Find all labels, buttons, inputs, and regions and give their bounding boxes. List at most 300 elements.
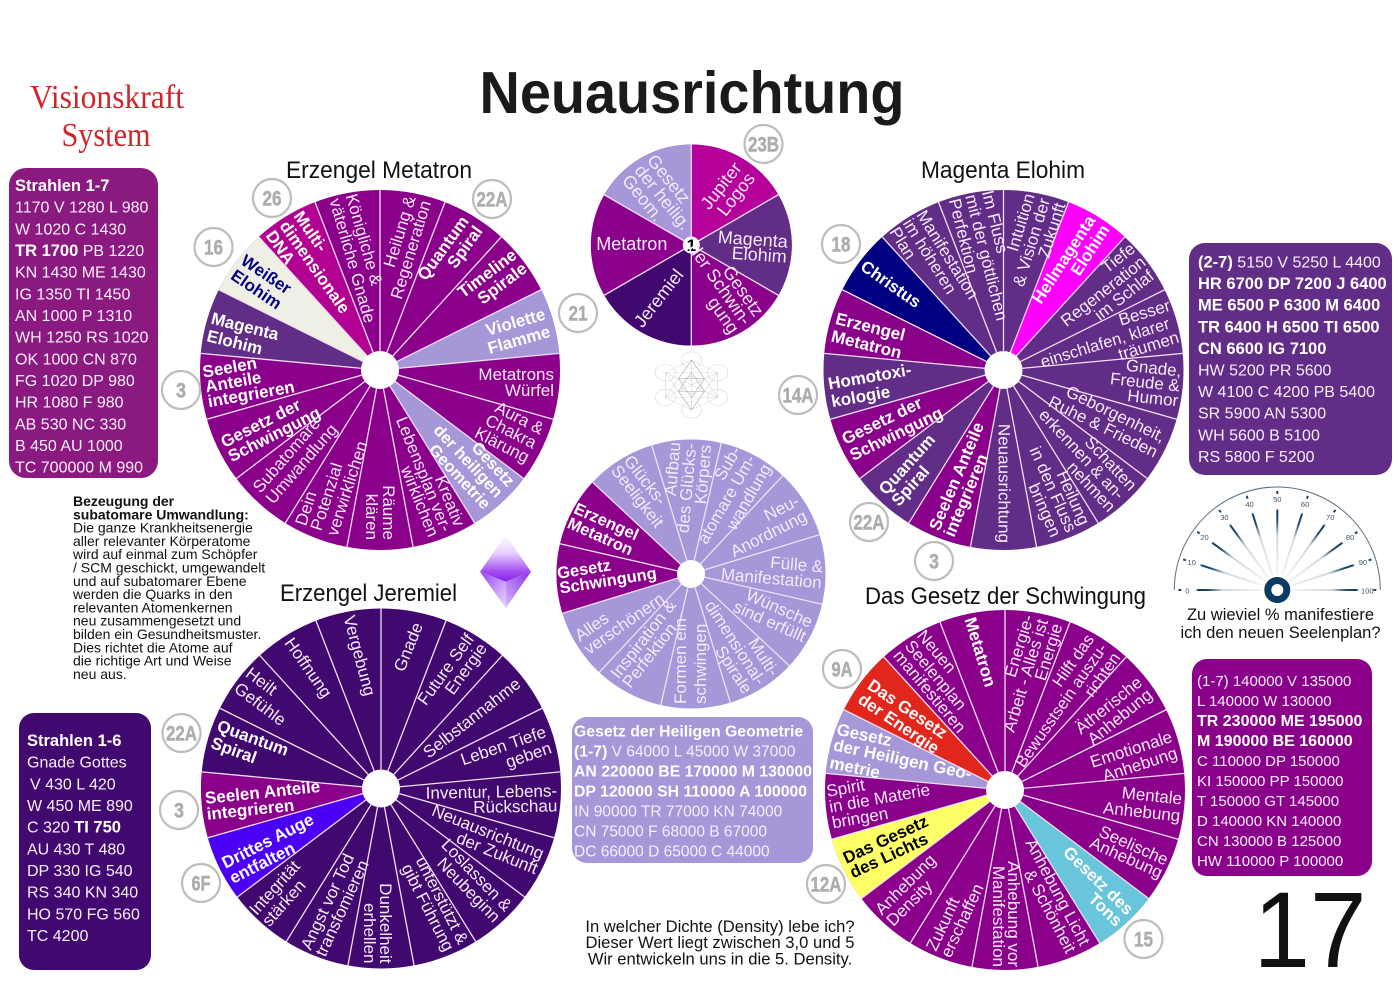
label: Dein Potenzial verwirklichen: Dein	[292, 489, 321, 528]
panel: Strahlen 1-6: Gnade Gottes	[27, 755, 127, 772]
label: Zukunft erschaffen: Zukunft	[922, 894, 964, 954]
label: Schatten erkennen & annehmen: Schatten	[1081, 433, 1140, 495]
text block: Bezeugung der subatomaren Umwandlung: und auf subatomarer Ebene	[73, 573, 247, 589]
badge: 3: 3	[174, 800, 184, 822]
segment: Multidimensionale DNA	[259, 193, 428, 370]
label: Heilt Gefühle: Heilt	[242, 664, 281, 699]
panel: (2-7) values: TR 6400 H 6500 TI 6500	[1198, 318, 1380, 336]
panel: (1-7) values: HW 110000 P 100000	[1197, 853, 1343, 870]
label: Leben Tiefe geben: Leben Tiefe	[458, 722, 548, 769]
label: Magenta Elohim: Magenta	[717, 227, 789, 252]
label: Violette Flamme: Flamme	[485, 322, 552, 358]
logo: Visionskraft System: System	[62, 117, 150, 154]
label: Drittes Auge entfalten: entfalten	[226, 838, 298, 888]
label: Quantum Spiral: Quantum	[215, 716, 291, 760]
label: Spirit in die Materie bringen: Spirit	[825, 775, 867, 801]
label: Aura & Chakra Klärung: Klärung	[471, 423, 532, 467]
label: Geborgenheit, Ruhe & Frieden: Geborgenheit,	[1063, 382, 1168, 446]
text block: Bezeugung der subatomaren Umwandlung: werden die Quarks in den	[72, 586, 233, 602]
label: Multidimensional-Spirale: Spirale	[711, 642, 756, 697]
panel: (1-7) values: T 150000 GT 145000	[1197, 793, 1339, 810]
panel: (2-7) values: RS 5800 F 5200	[1198, 449, 1315, 466]
panel: Gesetz der Heiligen Geometrie: DP 120000 SH 110000 A 100000	[574, 784, 807, 801]
label: Gesetz der heilig. Geom.: der heilig.	[631, 161, 695, 234]
segment: Jupiter Logos	[691, 144, 778, 245]
badge: 16	[194, 228, 232, 266]
label: Anhebung vor Manifestation: Anhebung vor	[1004, 861, 1023, 967]
label: Kreativ Lebensplan verwirklichen: Lebensplan ver-	[392, 414, 455, 534]
label: Zukunft erschaffen: erschaffen	[937, 881, 988, 960]
wheel: Erzengel Metatron	[200, 190, 570, 550]
label: Anhebung Density: Density	[883, 876, 937, 930]
label: Integrität stärken: stärken	[258, 876, 310, 930]
label: Neuausrichtung der Zukunft: der Zukunft	[454, 828, 541, 878]
badge: 9A: 9A	[832, 658, 852, 682]
label: Seelen Anteile integrieren: integrieren	[940, 451, 992, 540]
label: Subatomare Umwandlung: wandlung	[722, 461, 775, 534]
label: Königliche & väterliche Gnade: väterliche Gnade	[325, 196, 379, 325]
segment: Das Gesetz des Lichts	[822, 738, 1005, 898]
label: Aura & Chakra Klärung: Chakra	[482, 411, 540, 453]
panel: Strahlen 1-6: V 430 L 420	[30, 776, 116, 793]
label: Angst vor Tod transfomieren: transfomieren	[312, 857, 373, 959]
label: Das Gesetz des Lichts: Das Gesetz	[840, 812, 931, 868]
label: Leben Tiefe geben: geben	[503, 738, 554, 772]
label: Quantum Spiral: Spiral	[888, 462, 933, 510]
label: Neu-Anordnung: Neu-	[761, 491, 802, 525]
label: Hoffnung: Hoffnung	[281, 634, 336, 701]
panel: Strahlen 1-7: 1170 V 1280 L 980	[15, 200, 149, 217]
label: Quantum Spiral: Quantum	[875, 430, 939, 498]
center hole	[361, 351, 399, 389]
label: Homotoxikologie: kologie	[830, 382, 892, 411]
label: Aufbau des Glücks-Körpers: Aufbau	[661, 441, 684, 497]
panel: Strahlen 1-7	[9, 168, 158, 478]
badge: 14A: 14A	[782, 384, 814, 408]
label: Hilft das Bewusstsein auszurichten: richten	[1081, 650, 1124, 700]
panel: Strahlen 1-6: AU 430 T 480	[27, 841, 125, 858]
label: Seelen Anteile integrieren: Seelen	[201, 353, 258, 382]
label: Anhebung vor Manifestation: Manifestation	[989, 866, 1008, 967]
label: Besser einschlafen, klarer träumen: Besser	[1116, 296, 1173, 330]
panel: Strahlen 1-7: W 1020 C 1430	[15, 221, 126, 238]
wheel: Erzengel Jeremiel	[190, 608, 561, 968]
label: Fülle & Manifestation: Fülle &	[770, 553, 825, 577]
text block: Bezeugung der subatomaren Umwandlung: Die ganze Krankheitsenergie	[73, 520, 253, 536]
label: Gesetz der heiligen Geometrie: Geometrie	[425, 441, 494, 513]
badge: 3: 3	[929, 550, 939, 574]
label: Gnade, Freude & Humor: Humor	[1126, 386, 1180, 410]
label: Anhebung Licht & Schönheit: & Schönheit	[1020, 866, 1080, 957]
label: Tiefe Regeneration im Schlaf: Regeneration	[1057, 253, 1149, 330]
text block: Bezeugung der subatomaren Umwandlung: wird auf einmal zum Schöpfer	[72, 546, 258, 562]
panel: Gesetz der Heiligen Geometrie: AN 220000 BE 170000 M 130000	[574, 764, 812, 781]
gauge: manifestation percent: 60	[1301, 500, 1309, 509]
label: Formen einschwingen: Formen ein-	[671, 612, 690, 704]
label: Multidimensionale DNA: DNA	[262, 227, 299, 268]
label: Anhebung Licht & Schönheit: Anhebung Licht	[1022, 836, 1094, 949]
label: Manifestation im höheren Plan: im höheren	[899, 215, 960, 298]
panel: Strahlen 1-7: AB 530 NC 330	[15, 416, 126, 433]
panel: Strahlen 1-6: DP 330 IG 540	[27, 863, 133, 880]
panel: (2-7) values	[1189, 243, 1392, 475]
label: Aura & Chakra Klärung: Aura &	[492, 398, 547, 439]
wheel: small center wheel	[591, 119, 822, 346]
label: unterstützt & gibt Führung: unterstützt &	[412, 853, 472, 948]
text block: Bezeugung der subatomaren Umwandlung: neu aus.	[73, 666, 127, 682]
badge: 12A: 12A	[810, 874, 842, 896]
gauge: manifestation percent: 100	[1361, 586, 1374, 596]
center hole	[986, 771, 1024, 809]
label: Metatrons Würfel: Metatrons	[478, 365, 554, 384]
label: Gesetz des Tons: Gesetz des	[1059, 843, 1137, 919]
label: Mentale Anhebung: Mentale	[1121, 783, 1183, 809]
label: Inspiration & Perfektion: Inspiration &	[607, 596, 680, 682]
label: Schatten erkennen & annehmen: nehmen	[1063, 458, 1119, 516]
label: Gesetz der Schwingung: Schwingung	[847, 403, 946, 465]
panel: (1-7) values: C 110000 DP 150000	[1197, 753, 1340, 770]
center hole	[677, 560, 705, 588]
panel: Strahlen 1-6	[19, 713, 151, 970]
label: unterstützt & gibt Führung: gibt Führung	[398, 861, 458, 954]
label: Multidimensionale DNA: Multi-	[290, 207, 331, 256]
label: Gesetz der Schwingung: Gesetz	[719, 262, 768, 320]
badge: 3	[915, 542, 953, 580]
panel: (1-7) values: TR 230000 ME 195000	[1197, 713, 1363, 730]
panel: Strahlen 1-7: WH 1250 RS 1020	[15, 330, 149, 347]
panel: (2-7) values: SR 5900 AN 5300	[1198, 406, 1326, 423]
label: Subatomare Umwandlung: Subatomare	[249, 414, 324, 497]
label: Besser einschlafen, klarer träumen: träumen	[1116, 328, 1181, 364]
label: Gesetz der Schwingung: der Schwin-	[684, 239, 755, 329]
label: Gnade: Gnade	[390, 620, 427, 674]
panel: (1-7) values: M 190000 BE 160000	[1197, 733, 1353, 750]
text block: Bezeugung der subatomaren Umwandlung: aller relevanter Körperatome	[73, 533, 251, 549]
panel: Strahlen 1-6: W 450 ME 890	[27, 798, 133, 815]
badge: 15: 15	[1134, 928, 1153, 952]
label: Schatten erkennen & annehmen: erkennen & an-	[1035, 405, 1128, 503]
text block: density: Dieser Wert liegt zwischen 3,0 und 5	[585, 933, 855, 952]
label: Timeline Spirale: Timeline	[454, 245, 520, 302]
badge: 23B	[744, 125, 782, 163]
panel: (1-7) values: (1-7) 140000 V 135000	[1197, 673, 1351, 690]
label: Heilung in den Fluss bringen: in den Fluss	[1026, 444, 1080, 535]
label: Gesetz der Schwingung: Gesetz der	[218, 395, 304, 452]
label: Räume klären: Räume	[379, 485, 398, 540]
label: Emotionale Anhebung: Anhebung	[1100, 744, 1180, 786]
panel: Strahlen 1-7: B 450 AU 1000	[15, 438, 123, 455]
label: Quantum Spiral: Spiral	[443, 222, 487, 272]
label: Future Self Energie: Energie	[441, 640, 491, 698]
label: Wünsche sind erfüllt: Wünsche	[743, 585, 815, 631]
center number 1: 1	[687, 236, 696, 255]
label: Neu-Anordnung: Anordnung	[727, 507, 810, 561]
label: Heilung in den Fluss bringen: bringen	[1024, 480, 1065, 540]
label: Jupiter Logos: Logos	[713, 169, 759, 220]
badge: 22A	[473, 180, 511, 218]
label: Ätherische Anhebung: Anhebung	[1084, 685, 1156, 749]
label: Energie-Arbeit - Alles ist Energie: Energie-	[1001, 612, 1038, 680]
label: Emotionale Anhebung: Emotionale	[1088, 727, 1175, 772]
logo: Visionskraft System	[30, 79, 185, 154]
center hole	[984, 351, 1022, 389]
label: Magenta Elohim: Magenta	[209, 309, 281, 344]
panel: Strahlen 1-7: OK 1000 CN 870	[15, 351, 137, 368]
label: Seelische Anhebung: Anhebung	[1087, 833, 1165, 882]
badge: 9A	[823, 650, 861, 688]
badge: 22A: 22A	[476, 188, 508, 212]
segment: Gesetz der heilig. Geom.	[604, 119, 735, 245]
label: Gesetz der Schwingung: gung	[704, 293, 743, 337]
label: Inventur, Lebens-Rückschau: Rückschau	[473, 796, 557, 817]
segment: Weißer Elohim	[219, 232, 409, 370]
gauge: manifestation percent: 10	[1188, 558, 1196, 567]
label: Multidimensional-Spirale: dimensional-	[701, 597, 769, 688]
panel: Strahlen 1-7: AN 1000 P 1310	[15, 308, 132, 325]
panel: Strahlen 1-7: IG 1350 TI 1450	[15, 286, 130, 303]
label: Timeline Spirale: Spirale	[474, 259, 531, 308]
label: Gnade, Freude & Humor: Freude &	[1109, 369, 1181, 396]
label: Neuausrichtung: Neuausrichtung	[994, 424, 1014, 543]
panel: Strahlen 1-7: TR 1700 PB 1220	[15, 242, 144, 260]
label: Gesetz der heiligen Geometrie: Gesetz	[468, 439, 518, 490]
label: Inspiration & Perfektion: Perfektion	[618, 619, 681, 691]
gauge caption: Zu wieviel % manifestiere	[1187, 606, 1374, 624]
label: Seelen Anteile integrieren: integrieren	[206, 377, 296, 411]
panel: Strahlen 1-7: HR 1080 F 980	[15, 395, 124, 412]
text block: Bezeugung der subatomaren Umwandlung: / SCM geschickt, umgewandelt	[73, 560, 265, 576]
label: Multidimensionale DNA: dimensionale	[276, 217, 354, 317]
center hole	[362, 770, 400, 808]
text block: Bezeugung der subatomaren Umwandlung: bilden ein Gesundheitsmuster.	[73, 626, 261, 642]
label: Geborgenheit, Ruhe & Frieden: Ruhe & Frieden	[1045, 392, 1161, 462]
segment: Gesetz der heiligen Geometrie	[341, 370, 524, 530]
label: Fülle & Manifestation: Manifestation	[720, 565, 823, 592]
badge: 22A	[850, 503, 888, 541]
label: Heilung & Regeneration: Regeneration	[387, 198, 435, 301]
panel: (1-7) values	[1192, 659, 1372, 876]
text block: density: In welcher Dichte (Density) lebe ich?	[585, 917, 855, 936]
panel: Strahlen 1-6: RS 340 KN 340	[27, 885, 138, 902]
label: Subatomare Umwandlung: Sub-	[710, 443, 745, 484]
badge: 3: 3	[176, 380, 186, 402]
label: Intuition & Vision der Zukunft: & Vision der	[1009, 196, 1054, 289]
segment: Violette Flamme	[380, 290, 570, 428]
label: Subatomare Umwandlung: Umwandlung	[262, 420, 341, 508]
heading: Das Gesetz der Schwingung: Das Gesetz der Schwingung	[865, 583, 1146, 610]
label: Subatomare Umwandlung: atomare Um-	[694, 452, 760, 547]
panel: (2-7) values: CN 6600 IG 7100	[1198, 340, 1326, 358]
label: Gesetz der heiligen Geometrie: der heiligen	[430, 421, 506, 501]
panel: (2-7) values: (2-7) 5150 V 5250 L 4400	[1198, 254, 1381, 272]
label: Glücks-Seeligkeit: Glücks-	[620, 452, 670, 509]
panel: (1-7) values: D 140000 KN 140000	[1197, 813, 1341, 830]
label: Erzengel Metatron: Erzengel	[571, 500, 641, 544]
label: Loslassen & Neubeginn: Neubeginn	[433, 854, 504, 926]
panel: (2-7) values: HW 5200 PR 5600	[1198, 362, 1332, 380]
panel: Gesetz der Heiligen Geometrie: CN 75000 F 68000 B 67000	[574, 824, 767, 841]
label: Gesetz der Schwingung: Gesetz der	[839, 393, 926, 449]
label: Neuen Seelenplan manifestieren: Seelenplan	[901, 637, 970, 714]
badge: 21	[559, 294, 597, 332]
label: Seelen Anteile integrieren: Anteile	[204, 368, 263, 396]
panel: (1-7) values: KI 150000 PP 150000	[1197, 773, 1344, 790]
segment: Hellmagenta Elohim	[1004, 202, 1129, 393]
badge: 14A	[779, 376, 817, 414]
label: Erzengel Metatron: Metatron	[829, 327, 904, 362]
label: Alles verschönern: verschönern	[580, 589, 668, 658]
segment: Christus	[842, 232, 1032, 370]
text block: Bezeugung der subatomaren Umwandlung: die richtige Art und Weise	[73, 653, 232, 669]
panel: Strahlen 1-6: Strahlen 1-6	[27, 732, 121, 750]
label: Weißer Elohim: Weißer	[237, 251, 295, 298]
panel: Gesetz der Heiligen Geometrie	[572, 717, 813, 863]
badge: 26: 26	[262, 188, 282, 210]
label: Mentale Anhebung: Anhebung	[1102, 798, 1181, 825]
label: Quantum Spiral: Spiral	[208, 733, 259, 767]
label: Hilft das Bewusstsein auszurichten: Bewusstsein auszu-	[1012, 640, 1111, 771]
segment: Seelen Anteile integrieren	[907, 358, 1004, 547]
label: Jeremiel: Jeremiel	[630, 265, 687, 331]
heading: Magenta Elohim: Magenta Elohim	[921, 157, 1085, 184]
label: Selbstannahme: Selbstannahme	[419, 674, 524, 762]
panel: Strahlen 1-7: Strahlen 1-7	[15, 177, 109, 195]
label: Multidimensional-Spirale: Multi-	[744, 635, 783, 680]
gauge: manifestation percent: 70	[1326, 513, 1334, 522]
badge: 6F: 6F	[192, 872, 211, 896]
label: Violette Flamme: Violette	[484, 305, 548, 340]
segment: Das Gesetz der Energie	[844, 652, 1034, 790]
label: Kreativ Lebensplan verwirklichen: wirklichen	[396, 462, 442, 540]
wheel: lower center wheel	[543, 440, 826, 708]
label: Spirit in die Materie bringen: bringen	[830, 804, 890, 832]
label: Aufbau des Glücks-Körpers: des Glücks-	[674, 443, 700, 534]
label: Seelen Anteile integrieren: Seelen Anteile	[925, 419, 988, 533]
label: Metatrons Würfel: Würfel	[505, 381, 554, 400]
text block: density: Wir entwickeln uns in die 5. Density.	[588, 950, 852, 968]
label: Metatron: Metatron	[596, 234, 667, 254]
panel: Strahlen 1-7: FG 1020 DP 980	[15, 373, 135, 390]
wheel: Magenta Elohim	[821, 188, 1184, 550]
label: Gesetz der Heiligen Geometrie: Gesetz	[835, 720, 893, 750]
label: Dein Potenzial verwirklichen: Potenzial	[307, 461, 347, 533]
label: Gesetz Schwingung: Schwingung	[558, 564, 658, 598]
panel: Gesetz der Heiligen Geometrie: Gesetz der Heiligen Geometrie	[574, 724, 803, 741]
segment: Erzengel Metatron	[824, 289, 1009, 370]
label: Heilung in den Fluss bringen: Heilung	[1053, 468, 1093, 528]
label: Quantum Spiral: Quantum	[414, 212, 473, 284]
label: Vergebung: Vergebung	[340, 614, 379, 698]
wheel: Das Gesetz der Schwingung	[822, 610, 1185, 970]
label: Intuition & Vision der Zukunft: Zukunft	[1035, 200, 1069, 260]
text block: Bezeugung der subatomaren Umwandlung: relevanten Atomenkernen	[73, 599, 233, 615]
label: Heilung & Regeneration: Heilung &	[380, 193, 420, 270]
icon: crystal	[480, 535, 531, 608]
label: Loslassen & Neubeginn: Loslassen &	[438, 835, 516, 916]
label: Ätherische Anhebung: Ätherische	[1072, 673, 1146, 738]
badge: 22A	[162, 714, 200, 752]
label: Energie-Arbeit - Alles ist Energie: Arbeit - Alles ist	[1000, 617, 1052, 734]
label: Das Gesetz des Lichts: des Lichts	[847, 829, 931, 882]
label: Intuition & Vision der Zukunft: Intuition	[1003, 191, 1039, 254]
badge: 22A: 22A	[854, 512, 884, 534]
label: Drittes Auge entfalten: Drittes Auge	[219, 810, 317, 872]
text block: Bezeugung der subatomaren Umwandlung: Bezeugung der	[73, 493, 175, 509]
segment: Gesetz der Schwingung	[821, 318, 1004, 478]
label: Gesetz der heilig. Geom.: Geom.	[618, 171, 668, 225]
gauge: manifestation percent: 90	[1359, 558, 1367, 567]
panel: Strahlen 1-7: KN 1430 ME 1430	[15, 265, 146, 282]
text block: Bezeugung der subatomaren Umwandlung: subatomare Umwandlung:	[73, 506, 249, 522]
panel: Gesetz der Heiligen Geometrie: DC 66000 D 65000 C 44000	[574, 844, 770, 861]
heading: Erzengel Jeremiel: Erzengel Jeremiel	[280, 580, 457, 607]
label: Neuen Seelenplan manifestieren: Neuen	[913, 626, 960, 677]
label: Gesetz der Schwingung: Schwingung	[225, 403, 324, 466]
label: Im Fluss mit der göttlichen Perfektion: mit der göttlichen	[961, 192, 1011, 323]
badge: 22A: 22A	[166, 722, 197, 746]
gauge: manifestation percent: 40	[1245, 500, 1254, 509]
label: Seelen Anteile integrieren: Seelen Anteile	[204, 777, 321, 808]
panel: Strahlen 1-6: HO 570 FG 560	[27, 906, 140, 923]
label: Inventur, Lebens-Rückschau: Inventur, Lebens-	[426, 781, 557, 803]
text block: Bezeugung der subatomaren Umwandlung: Dies richtet die Atome auf	[73, 639, 233, 655]
badge: 3	[160, 791, 198, 829]
label: Erzengel Metatron: Erzengel	[834, 309, 907, 345]
panel: Gesetz der Heiligen Geometrie: IN 90000 TR 77000 KN 74000	[574, 804, 783, 821]
segment: Seelen Anteile integrieren	[190, 726, 381, 838]
label: Gesetz Schwingung: Gesetz	[556, 557, 612, 583]
panel: Strahlen 1-6: TC 4200	[27, 928, 88, 945]
gauge: manifestation percent: 30	[1220, 513, 1229, 522]
label: Tiefe Regeneration im Schlaf: im Schlaf	[1091, 266, 1158, 324]
label: Gesetz des Tons: Tons	[1085, 889, 1126, 930]
label: Im Fluss mit der göttlichen Perfektion: Perfektion	[945, 197, 982, 275]
label: Dunkelheit erhellen: Dunkelheit	[376, 883, 395, 964]
label: Spirit in die Materie bringen: in die Materie	[828, 780, 931, 817]
label: Seelen Anteile integrieren: integrieren	[206, 796, 295, 824]
badge: 15	[1124, 920, 1162, 958]
label: Manifestation im höheren Plan: Manifestation	[913, 207, 982, 303]
segment: Gesetz Schwingung	[543, 510, 691, 613]
label: Jupiter Logos: Jupiter	[697, 158, 746, 213]
label: Metatron: Metatron	[961, 615, 1000, 689]
label: Gesetz der Heiligen Geometrie: der Heiligen Geo-	[832, 736, 973, 783]
badge: 3	[162, 371, 200, 409]
label: Weißer Elohim: Elohim	[227, 266, 285, 313]
label: Hilft das Bewusstsein auszurichten: Hilft das	[1049, 631, 1098, 690]
label: Formen einschwingen: schwingen	[691, 624, 710, 704]
badge: 12A	[807, 865, 845, 903]
label: Das Gesetz der Energie: der Energie	[855, 690, 943, 758]
label: Gnade, Freude & Humor: Gnade,	[1125, 356, 1182, 381]
label: Angst vor Tod transfomieren: Angst vor Tod	[297, 851, 358, 953]
panel: (2-7) values: ME 6500 P 6300 M 6400	[1198, 297, 1380, 315]
label: Magenta Elohim: Elohim	[205, 326, 264, 359]
title: Neuausrichtung	[480, 60, 904, 126]
badge: 26	[253, 179, 291, 217]
badge: 18: 18	[832, 234, 851, 256]
center number 1	[683, 236, 700, 255]
label: Energie-Arbeit - Alles ist Energie: Energie	[1031, 621, 1066, 683]
gauge caption: ich den neuen Seelenplan?	[1180, 624, 1381, 642]
panel: Strahlen 1-7: TC 700000 M 990	[15, 460, 143, 477]
panel: (2-7) values: WH 5600 B 5100	[1198, 427, 1320, 444]
label: Anhebung Density: Anhebung	[871, 850, 940, 919]
label: Manifestation im höheren Plan: Plan	[885, 224, 920, 263]
label: Integrität stärken: Integrität	[246, 857, 304, 919]
label: Neuausrichtung der Zukunft: Neuausrichtung	[429, 801, 547, 863]
panel: (1-7) values: L 140000 W 130000	[1197, 693, 1332, 710]
